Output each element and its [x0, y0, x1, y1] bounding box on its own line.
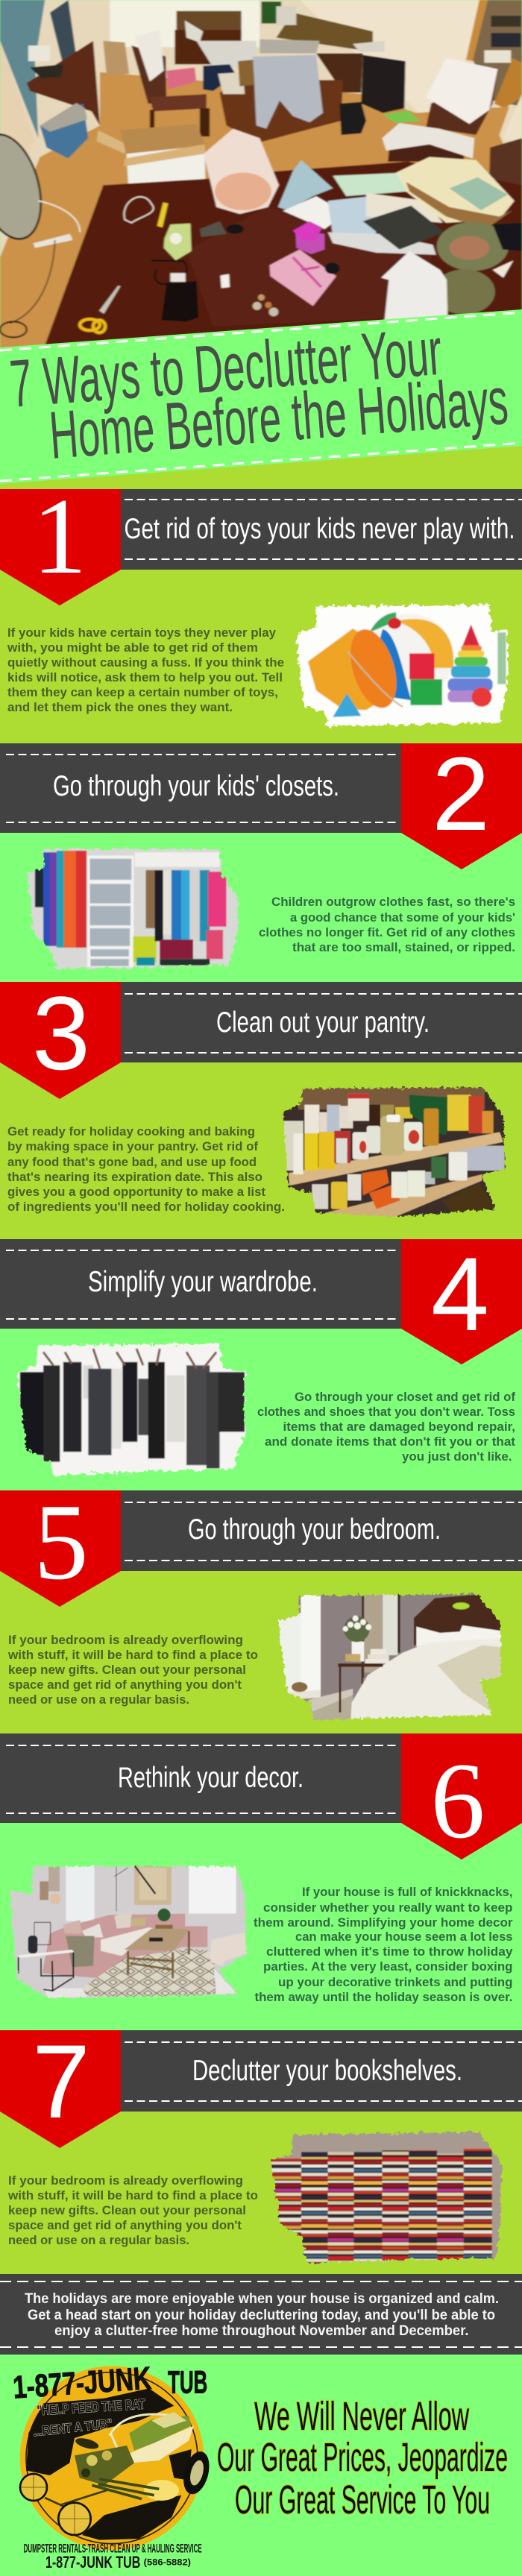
background: olive section 1 [0, 418, 522, 743]
logo slogan [32, 2396, 146, 2439]
step 2 body text: Children outgrow clothes fast, so there's [271, 895, 515, 909]
step 3 body text [7, 1124, 285, 1214]
logo slogan: "HELP FEED THE RAT [37, 2396, 146, 2418]
closing message band: Get a head start on your holiday decluttering today, and you'll be able to [28, 2308, 495, 2323]
logo slogan: ...RENT A TUB" [32, 2416, 113, 2439]
step 4 header: Simplify your wardrobe. [88, 1266, 318, 1298]
step 4 image: clothes rack [5, 1335, 254, 1481]
logo phone: (586-5882) [144, 2557, 191, 2568]
background: green section 4 [0, 1239, 522, 1490]
step 5 header: Go through your bedroom. [188, 1514, 441, 1546]
step 3 body text: Get ready for holiday cooking and baking [7, 1124, 255, 1139]
step 4 body text: items that are damaged beyond repair, [283, 1420, 515, 1434]
step 6 body text: them away until the holiday season is over. [255, 1990, 513, 2004]
step 6 header: Rethink your decor. [118, 1762, 304, 1794]
slogan [217, 2394, 508, 2522]
step 5 body text [7, 1633, 258, 1707]
step 4 body text [257, 1390, 515, 1464]
step 3 body text: gives you a good opportunity to make a list [7, 1185, 265, 1199]
step 3 image: pantry [272, 1079, 513, 1221]
step 6 body text: up your decorative trinkets and putting [278, 1975, 513, 1989]
logo: 1-877-JUNK TUB: DUMPSTER RENTALS-TRASH CLEAN UP & HAULING SERVICE [24, 2541, 202, 2555]
step 1 body text: kids will notice, ask them to help you out. Tell [7, 670, 283, 684]
step 6 body text: cluttered when it's time to throw holiday [266, 1944, 513, 1959]
step 5 image: bedroom [268, 1584, 515, 1728]
closing message band: enjoy a clutter-free home throughout November and December. [54, 2323, 468, 2339]
step 6 body text: can make your house seem a lot less [295, 1930, 513, 1944]
step 5 body text: need or use on a regular basis. [8, 1692, 189, 1707]
background: olive section 3 [0, 982, 522, 1239]
step 6 body text: them around. Simplifying your home decor [254, 1915, 513, 1930]
step 4 header: 4 [431, 1235, 489, 1352]
step 1 body text: and let them pick the ones they want. [7, 700, 233, 714]
step 1 body text: with, you might be able to get rid of them [7, 640, 258, 655]
step 6 image: living room [0, 1857, 259, 2006]
step 5 body text: with stuff, it will be hard to find a place to [7, 1648, 258, 1662]
step 2 image: closet [15, 840, 248, 974]
logo heading: 1-877-JUNK [12, 2361, 152, 2406]
step 1 body text: them they can keep a certain number of toys, [7, 685, 278, 699]
step 7 body text: space and get rid of anything you don't [8, 2218, 242, 2232]
step 2 header: 2 [432, 735, 490, 852]
step 1 body text: quietly without causing a fuss. If you think the [7, 655, 284, 670]
step 1 header [0, 476, 522, 605]
step 7 image: stacked books [263, 2124, 509, 2271]
step 4 body text: Go through your closet and get rid of [295, 1390, 515, 1404]
background: green section 2 [0, 743, 522, 982]
logo: 1-877-JUNK TUB [12, 2361, 213, 2572]
step 5 body text: space and get rid of anything you don't [8, 1678, 242, 1692]
step 4 header [0, 1235, 522, 1364]
step 6 body text: parties. At the very least, consider boxing [263, 1959, 513, 1974]
step 7 body text: with stuff, it will be hard to find a place to [7, 2188, 258, 2202]
step 7 body text: need or use on a regular basis. [8, 2233, 189, 2247]
background: olive section 5 [0, 1490, 522, 1733]
step 4 body text: and donate items that don't fit you or that [265, 1435, 515, 1449]
step 3 body text: by making space in your pantry. Get rid of [7, 1139, 258, 1153]
step 6 body text [254, 1885, 513, 2004]
step 7 header [0, 2023, 522, 2148]
step 7 body text: If your bedroom is already overflowing [8, 2173, 243, 2188]
step 7 body text: keep new gifts. Clean out your personal [8, 2203, 246, 2217]
step 6 header [0, 1733, 522, 1861]
hero photo: cluttered living room [0, 0, 522, 377]
background: olive section 7 [0, 2030, 522, 2274]
step 2 header [0, 735, 522, 869]
step 1 body text [7, 626, 284, 714]
step 3 body text: that's nearing its expiration date. This also [7, 1170, 262, 1184]
step 6 header: 6 [431, 1740, 485, 1861]
step 6 body text: If your house is full of knickknacks, [302, 1885, 513, 1899]
step 2 body text: a good chance that some of your kids' [290, 910, 515, 925]
step 2 body text: that are too small, stained, or ripped. [292, 940, 515, 954]
step 5 header: 5 [34, 1481, 88, 1602]
step 4 body text: you just don't like. [402, 1449, 512, 1464]
step 5 header [0, 1481, 522, 1607]
step 1 image: toys [283, 595, 518, 734]
step 6 body text: consider whether you really want to keep [263, 1900, 513, 1915]
closing message band: The holidays are more enjoyable when your house is organized and calm. [25, 2291, 499, 2307]
step 1 header: 1 [33, 476, 87, 596]
background: footer green [0, 2355, 522, 2576]
step 5 body text: If your bedroom is already overflowing [8, 1633, 243, 1647]
logo phone: 1-877-JUNK TUB [45, 2553, 140, 2572]
step 3 header: 3 [32, 974, 90, 1092]
step 3 body text: any food that's gone bad, and use up food [7, 1155, 257, 1169]
step 1 body text: If your kids have certain toys they never play [7, 626, 277, 640]
closing message band [0, 2274, 522, 2355]
step 7 body text [7, 2173, 258, 2247]
logo heading: TUB [168, 2364, 207, 2400]
title banner [0, 309, 522, 484]
step 2 body text: clothes no longer fit. Get rid of any clothes [259, 925, 515, 939]
step 5 body text: keep new gifts. Clean out your personal [8, 1663, 246, 1677]
step 2 body text [259, 895, 515, 954]
step 7 header: 7 [32, 2023, 90, 2140]
background: green section 6 [0, 1733, 522, 2030]
step 4 body text: clothes and shoes that you don't wear. Toss [257, 1405, 515, 1419]
step 3 header: Clean out your pantry. [216, 1007, 430, 1039]
step 3 body text: of ingredients you'll need for holiday cooking. [7, 1200, 285, 1214]
step 3 header [0, 974, 522, 1099]
step 2 header: Go through your kids' closets. [53, 770, 339, 802]
